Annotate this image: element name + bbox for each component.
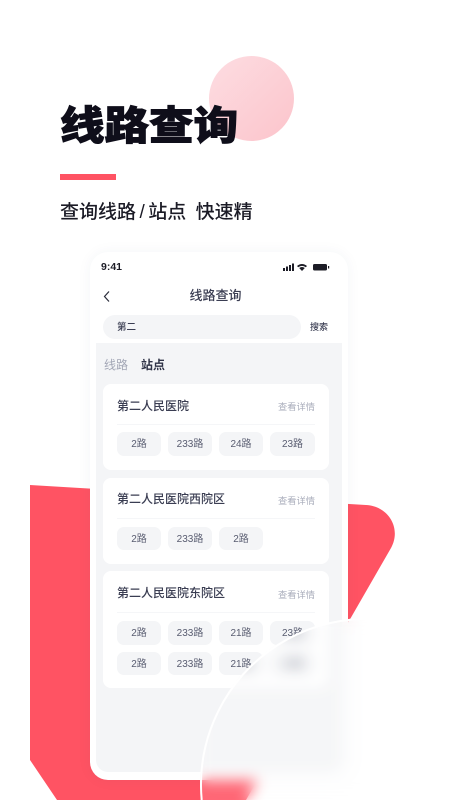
details link: 查看详情: [278, 496, 315, 506]
card title: 第二人民医院西院区: [117, 492, 225, 506]
card: hospital: [103, 384, 329, 470]
route chips: 2路: [131, 658, 147, 670]
nav title: 线路查询: [190, 288, 242, 303]
title accent bar: [60, 174, 116, 180]
card title: 第二人民医院: [117, 398, 189, 412]
route chips: [117, 527, 263, 550]
route chips: [117, 621, 314, 676]
route chips: 2路: [131, 534, 147, 544]
title: 线路查询: [60, 104, 238, 149]
tab: lines: 线路: [104, 358, 128, 372]
route chips: 2路: [131, 439, 147, 450]
search box: 第二: [117, 322, 136, 333]
route chips: 2路: [131, 628, 147, 639]
card title: 第二人民医院东院区: [117, 586, 225, 600]
route chips: 233路: [177, 658, 203, 670]
status bar time: 9:41: [101, 261, 122, 273]
route chips: 2路: [233, 534, 249, 544]
decorative pink circle: [209, 56, 294, 141]
route chips: 21路: [230, 658, 252, 670]
route chips: 233路: [177, 628, 203, 639]
route chips: [117, 432, 315, 456]
search button: 搜索: [310, 322, 328, 332]
route chips: 23路: [282, 658, 303, 670]
route chips: 233路: [177, 534, 203, 544]
glass circle rim: [200, 618, 350, 800]
back arrow: [104, 291, 110, 302]
phone mockup: [90, 252, 348, 780]
frosted glass circle: [202, 618, 350, 800]
grey content area: [96, 343, 342, 772]
status bar icons: [283, 264, 330, 271]
details link: 查看详情: [278, 590, 315, 600]
route chips: 23路: [282, 439, 303, 450]
route chips: 23路: [282, 628, 303, 639]
tab: stations: 站点: [141, 358, 165, 372]
route chips: 233路: [177, 439, 203, 450]
card: east branch: [103, 571, 329, 688]
card: west branch: [103, 478, 329, 564]
details link: 查看详情: [278, 402, 315, 412]
route chips: 21路: [230, 628, 252, 639]
route chips: 24路: [230, 439, 252, 450]
subtitle: 查询线路/站点 快速精: [60, 202, 253, 223]
search box: [103, 315, 301, 339]
